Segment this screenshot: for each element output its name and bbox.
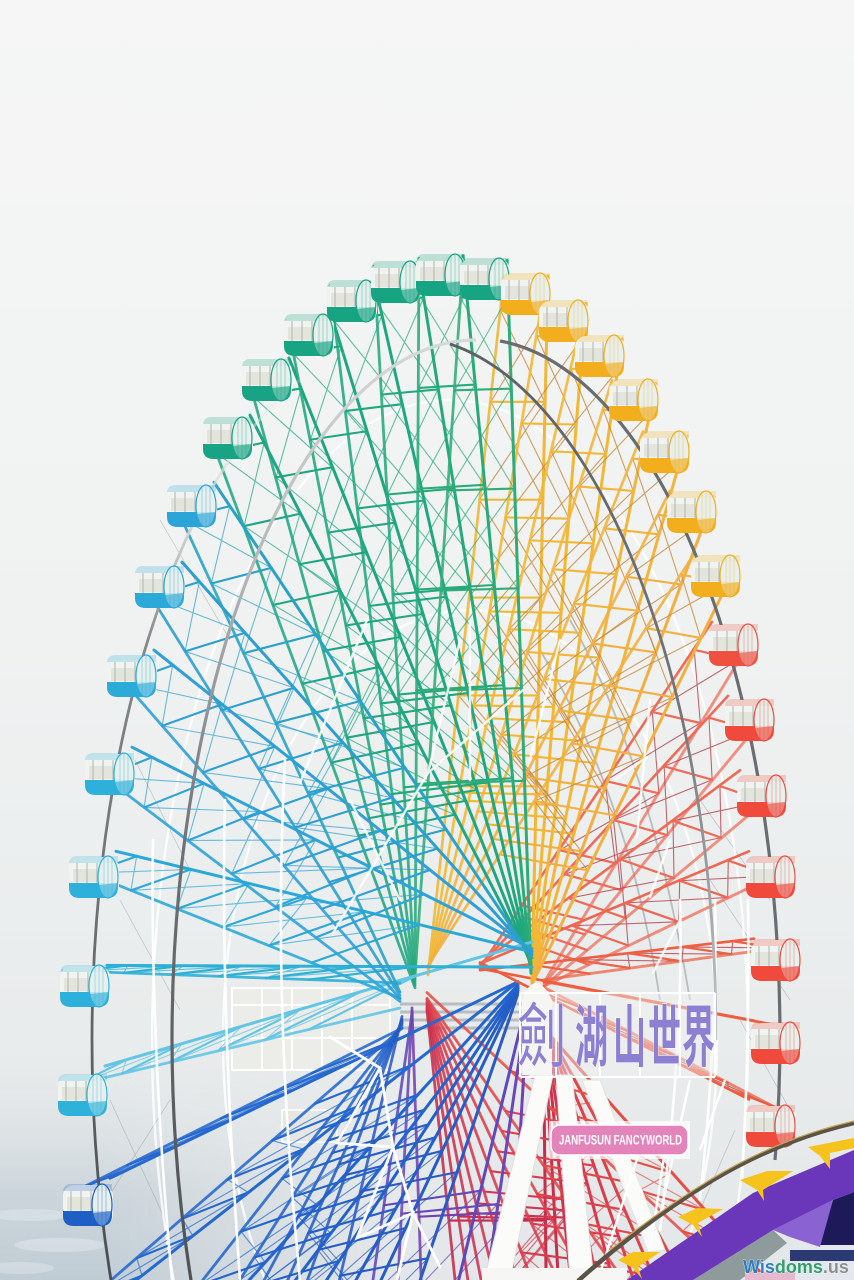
white tower legs and hub <box>482 983 725 1280</box>
spokes: red upper spokes <box>480 620 808 1120</box>
roller coaster: rail <box>578 1121 854 1280</box>
roller coaster: slate underside <box>693 1230 787 1280</box>
gondolas: green <box>203 254 510 459</box>
spokes: lower purple spokes <box>372 1006 526 1280</box>
outer dark steel ring, front <box>172 340 780 1280</box>
roller coaster: purple shard <box>773 1200 833 1247</box>
gondolas: dark blue <box>63 1184 113 1226</box>
sign: white lattice frame with purple characters <box>517 993 715 1077</box>
spokes: green spokes <box>170 254 543 988</box>
sign text: first character: 劍 <box>517 997 566 1076</box>
roller coaster: yellow tabs <box>618 1138 854 1279</box>
roller coaster: dark navy interior <box>817 1192 854 1250</box>
spokes: lower dark blue spokes <box>84 980 520 1280</box>
roller coaster: purple body <box>627 1150 854 1280</box>
sign text: remaining characters: 湖山世界 <box>575 1001 715 1076</box>
thin grey support cables <box>100 520 790 1230</box>
sign: pink Janfusun Fancyworld plate <box>549 1121 690 1159</box>
light grey inner rim arcs <box>540 620 690 1000</box>
white inner rims behind the spokes <box>152 400 748 1280</box>
white lattice building behind wheel <box>232 988 522 1142</box>
spokes: yellow spokes <box>428 276 768 984</box>
watermark: Wisdoms.us <box>743 1257 849 1277</box>
gondolas: cyan <box>58 485 217 1116</box>
white rim segments and white lattice in front of the spokes <box>153 620 748 1280</box>
outer dark steel ring, rear <box>92 340 716 1280</box>
background: hazy distant city, lower left <box>0 1118 320 1280</box>
roller coaster: lower right structure <box>745 1245 854 1280</box>
gondolas: red <box>709 624 801 1147</box>
spokes: lower crimson and red spokes <box>426 991 761 1280</box>
gondolas: yellow <box>501 273 741 597</box>
sign: pink Janfusun Fancyworld plate: JANFUSUN FANCYWORLD <box>559 1132 682 1148</box>
spokes: cyan spokes <box>17 471 532 1110</box>
